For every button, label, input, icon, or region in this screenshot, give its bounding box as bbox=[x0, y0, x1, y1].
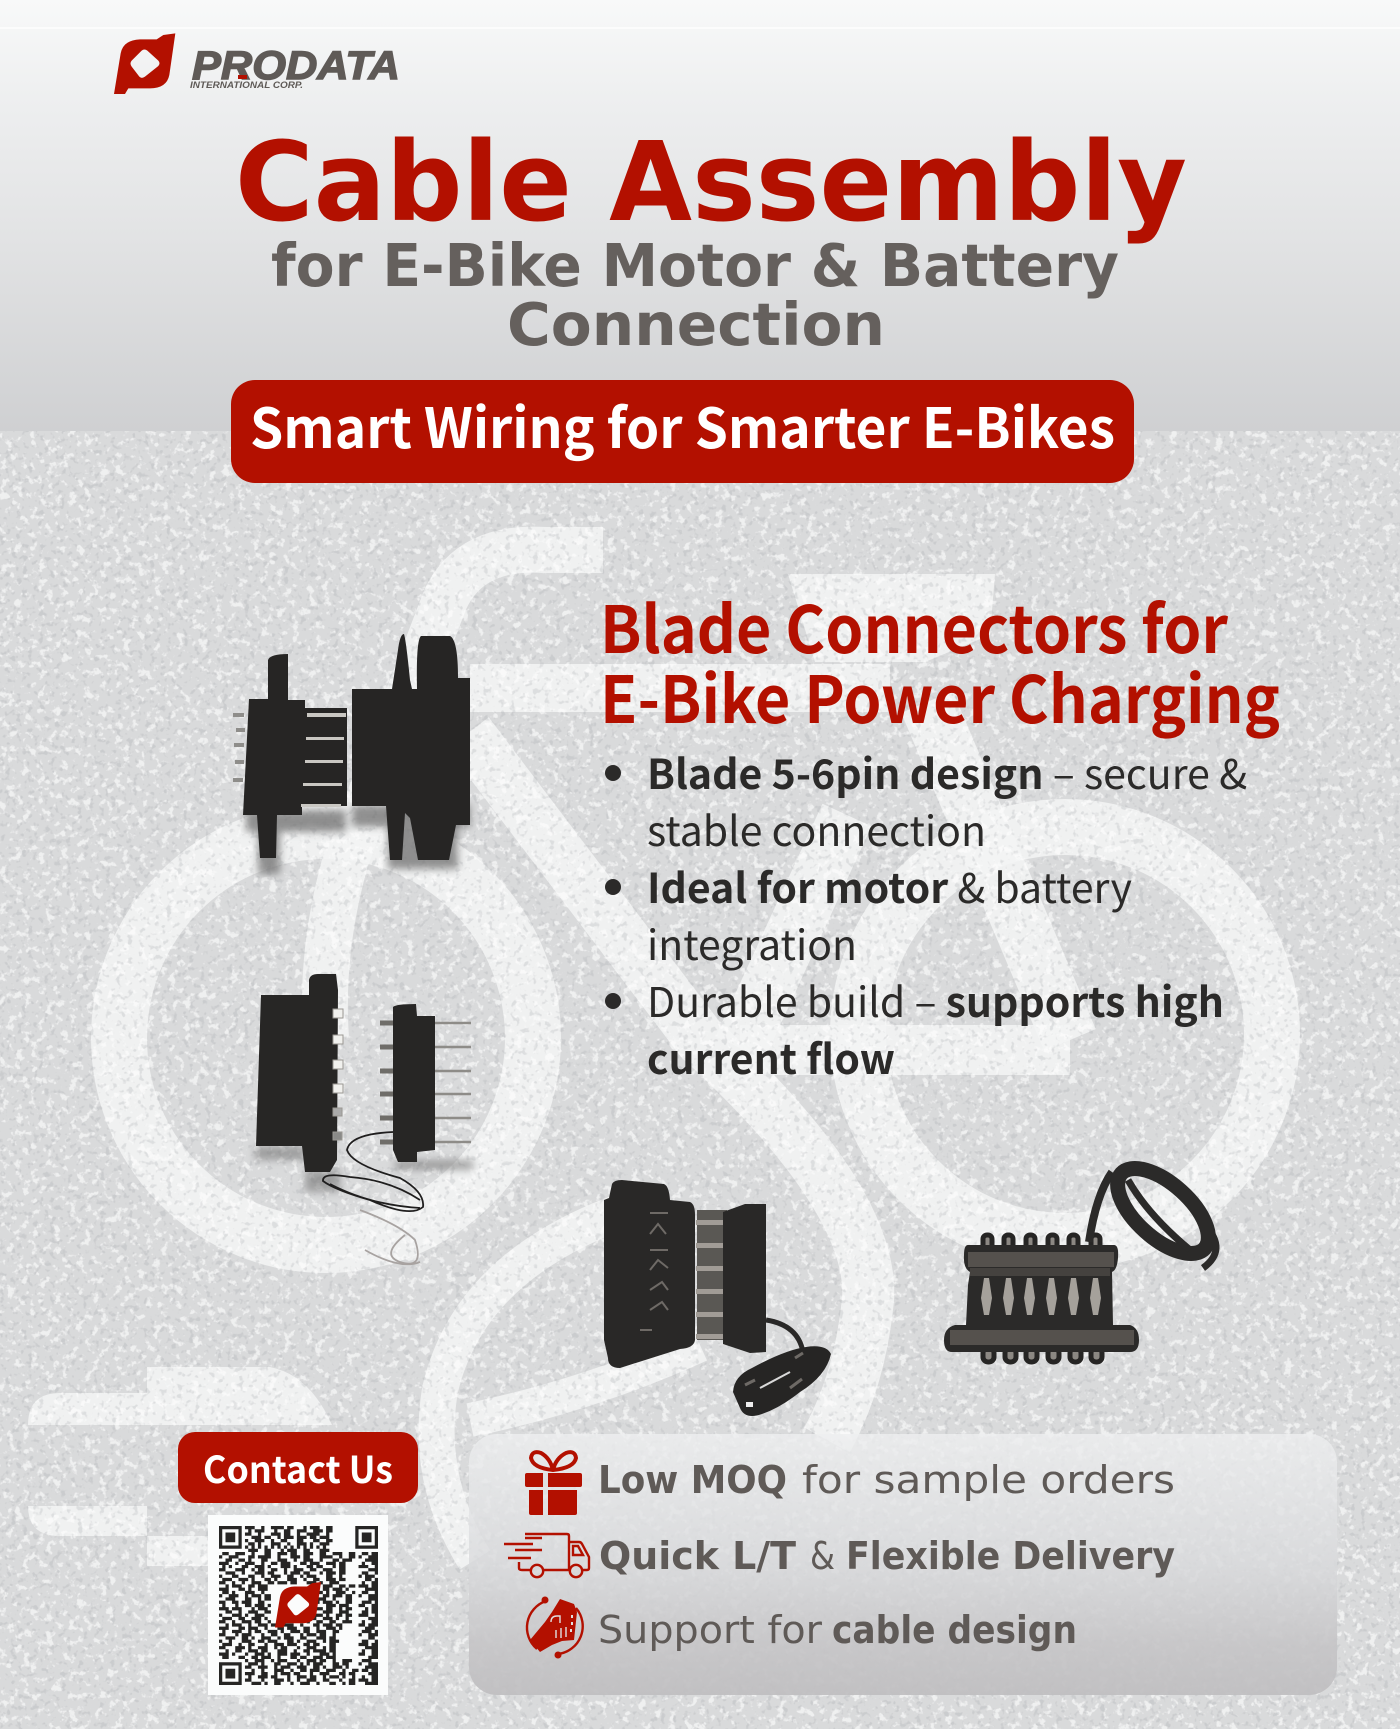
top pins bbox=[983, 1235, 1100, 1249]
icon: gift bbox=[525, 1452, 582, 1515]
bullet 3: Durable build – supports high bbox=[647, 969, 1224, 1029]
product photo: six pin connector with cable bbox=[944, 1153, 1223, 1362]
subtitle: Connection bbox=[507, 290, 885, 359]
benefit: quick delivery: & bbox=[810, 1534, 835, 1578]
textured road background bbox=[0, 430, 1400, 1729]
bullet list bbox=[605, 741, 1247, 1086]
section heading bbox=[600, 578, 1280, 742]
benefit: cable design support bbox=[598, 1608, 1077, 1652]
plug pins bbox=[301, 713, 346, 807]
product photo: connector pair with cable coil bbox=[604, 1180, 831, 1416]
left housing bbox=[256, 974, 338, 1172]
block detail bbox=[640, 1213, 668, 1330]
section heading: E-Bike Power Charging bbox=[600, 648, 1280, 742]
logo subline: INTERNATIONAL CORP. bbox=[190, 80, 303, 91]
blades bbox=[981, 1278, 1101, 1315]
product photo: blade connector pair, top bbox=[233, 634, 470, 874]
wires bbox=[323, 1132, 423, 1264]
right socket bbox=[352, 634, 470, 860]
shadow bbox=[246, 805, 470, 874]
connector body bbox=[944, 1245, 1139, 1352]
benefit: low MOQ bbox=[598, 1458, 1175, 1502]
QR code bbox=[208, 1515, 388, 1695]
bullet 2: Ideal for motor & battery bbox=[647, 855, 1132, 915]
bottom pins bbox=[983, 1348, 1102, 1362]
bullet 2: integration bbox=[647, 912, 857, 972]
tagline pill: Smart Wiring for Smarter E-Bikes bbox=[250, 384, 1115, 464]
right housing bbox=[393, 1004, 435, 1162]
QR centre logo bbox=[275, 1582, 321, 1628]
panel: benefits bbox=[469, 1434, 1337, 1695]
left plug bbox=[233, 654, 347, 858]
benefit: cable design support: cable design bbox=[832, 1608, 1077, 1652]
logo accent bbox=[238, 75, 247, 79]
section heading: Blade Connectors for bbox=[600, 578, 1229, 672]
logo bbox=[114, 33, 400, 94]
bullet 3 bbox=[605, 969, 1224, 1086]
benefit: quick delivery: Quick L/T bbox=[599, 1534, 796, 1578]
benefit: cable design support: Support for bbox=[598, 1608, 822, 1652]
benefit: quick delivery: Flexible Delivery bbox=[846, 1534, 1175, 1578]
cable coil bbox=[1089, 1153, 1223, 1269]
contact button: Contact Us bbox=[203, 1440, 393, 1494]
cable bbox=[766, 1320, 803, 1352]
icon: delivery truck bbox=[504, 1534, 589, 1577]
header gradient band bbox=[0, 0, 1400, 431]
flange shading bbox=[950, 1252, 1134, 1345]
benefit: quick delivery bbox=[599, 1534, 1175, 1578]
bullet 1: Blade 5-6pin design – secure & bbox=[647, 741, 1247, 801]
mating pins bbox=[696, 1210, 734, 1340]
subtitle bbox=[271, 231, 1119, 359]
pins bbox=[380, 1023, 471, 1142]
cable coil bbox=[733, 1346, 831, 1416]
left block bbox=[604, 1180, 695, 1368]
logo wordmark: PRODATA bbox=[192, 44, 400, 88]
bullet 1: stable connection bbox=[647, 798, 986, 858]
white tabs bbox=[333, 1009, 343, 1140]
bullet 1 bbox=[605, 741, 1247, 858]
product photo: blade connector pair with wires bbox=[255, 974, 473, 1264]
shadow bbox=[255, 1146, 473, 1192]
contact button bbox=[178, 1432, 418, 1503]
title: Cable Assembly bbox=[235, 118, 1187, 246]
bike road marking watermark bbox=[28, 550, 1272, 1566]
benefit: low MOQ: for sample orders bbox=[802, 1458, 1175, 1502]
bullet 3: current flow bbox=[647, 1026, 895, 1086]
bullet 2 bbox=[605, 855, 1132, 972]
benefit: low MOQ: Low MOQ bbox=[598, 1458, 787, 1502]
subtitle: for E-Bike Motor & Battery bbox=[271, 231, 1119, 300]
icon: design support hand bbox=[527, 1596, 583, 1658]
icon: logo mark bbox=[114, 33, 175, 94]
right block bbox=[723, 1204, 766, 1353]
